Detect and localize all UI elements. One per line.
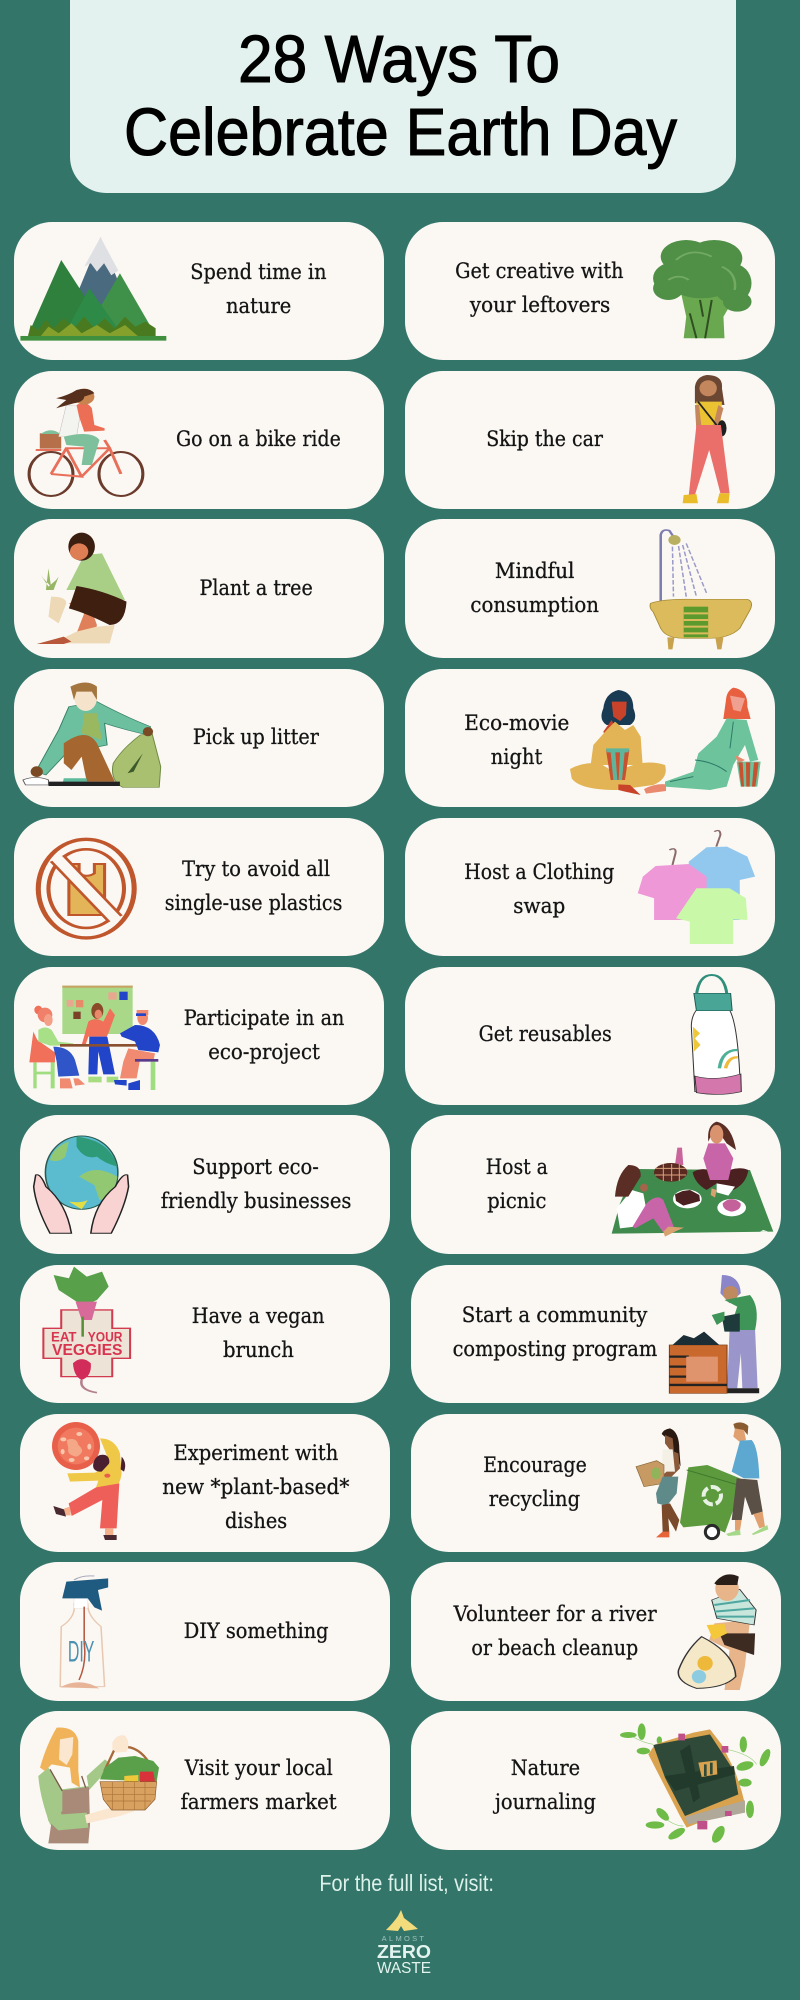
- logo: almost zero waste: ALMOST: [382, 1934, 426, 1943]
- panel: Try to avoid all single-use plastics: [14, 818, 384, 956]
- text: or beach cleanup: [471, 1636, 638, 1661]
- panel: Encourage recycling: [411, 1414, 781, 1552]
- text: composting program: [453, 1337, 657, 1362]
- icon: spray bottle: [60, 1576, 108, 1688]
- text: Start a community: [462, 1303, 648, 1328]
- label: DIY: DIY: [68, 1636, 95, 1669]
- text: [165, 857, 342, 916]
- panel: Host a picnic: [411, 1115, 781, 1254]
- panel: Have a vegan brunch: [20, 1265, 390, 1403]
- panel: Host a Clothing swap: [405, 818, 775, 956]
- text: [161, 1155, 352, 1214]
- icon: no plastic bag: [38, 839, 134, 938]
- text: journaling: [492, 1790, 596, 1815]
- text: [190, 260, 327, 319]
- panel: Eco-movie night: [405, 669, 775, 807]
- icon: shower bathtub: [650, 530, 752, 649]
- icon: reusable bottle: [691, 975, 741, 1094]
- title panel: [70, 0, 736, 193]
- text: Nature: [511, 1756, 580, 1781]
- text: brunch: [223, 1338, 294, 1363]
- text: Skip the car: [486, 427, 604, 452]
- text: Visit your local: [184, 1756, 333, 1781]
- text: Plant a tree: [200, 576, 313, 601]
- icon: bike rider: [29, 389, 143, 496]
- text: night: [491, 745, 543, 770]
- icon: team meeting: [29, 986, 160, 1090]
- text: [162, 1441, 350, 1534]
- text: Host a: [486, 1155, 548, 1180]
- panel: Spend time in nature: [14, 222, 384, 360]
- text: Pick up litter: [193, 725, 320, 750]
- text: friendly businesses: [161, 1189, 352, 1214]
- text: Get reusables: [479, 1022, 612, 1047]
- text: Mindful: [495, 559, 575, 584]
- text: dishes: [225, 1509, 287, 1534]
- text: [486, 1155, 548, 1214]
- panel: Nature journaling: [411, 1711, 781, 1850]
- text: [453, 1602, 657, 1661]
- panel: Get reusables: [405, 967, 775, 1105]
- panel: Participate in an eco-project: [14, 967, 384, 1105]
- panel: Support eco-friendly businesses: [20, 1115, 390, 1254]
- icon: picnic: [612, 1122, 773, 1237]
- text: [492, 1756, 596, 1815]
- text: Encourage: [483, 1453, 587, 1478]
- text: Have a vegan: [192, 1304, 325, 1329]
- text: Experiment with: [174, 1441, 338, 1466]
- label: eat your veggies: VEGGIES: [52, 1341, 123, 1359]
- icon: walking woman: [683, 375, 730, 503]
- icon: journal with leaves: [620, 1723, 773, 1845]
- footer text: For the full list, visit:: [319, 1870, 494, 1896]
- text: Spend time in: [190, 260, 327, 285]
- panel: Visit your local farmers market: [20, 1711, 390, 1850]
- text: nature: [226, 294, 291, 319]
- panel: Volunteer for a river or beach cleanup: [411, 1562, 781, 1701]
- icon: person planting: [37, 533, 127, 644]
- text: [455, 259, 624, 318]
- panel: Get creative with your leftovers: [405, 222, 775, 360]
- text: consumption: [470, 593, 599, 618]
- text: swap: [513, 894, 565, 919]
- text: eco-project: [208, 1040, 320, 1065]
- panel: DIY something: [20, 1562, 390, 1701]
- text: Get creative with: [455, 259, 624, 284]
- text: single-use plastics: [165, 891, 342, 916]
- text: your leftovers: [469, 293, 610, 318]
- icon: mountains: [20, 237, 166, 341]
- text: Try to avoid all: [182, 857, 330, 882]
- text: [470, 559, 599, 618]
- icon: broccoli: [653, 240, 752, 338]
- text: DIY something: [184, 1619, 329, 1644]
- label: eat your veggies: EAT: [51, 1330, 77, 1345]
- icon: t-shirts on hangers: [638, 831, 755, 944]
- panel: Go on a bike ride: [14, 371, 384, 509]
- icon: eat your veggies beet: [43, 1267, 130, 1393]
- text: [483, 1453, 587, 1512]
- icon: globe in hands: [34, 1136, 129, 1233]
- text: recycling: [489, 1487, 580, 1512]
- icon: two people with recycling bin: [636, 1422, 768, 1539]
- icon: woman with basket: [38, 1727, 159, 1843]
- title: [124, 22, 677, 170]
- text: Host a Clothing: [464, 860, 614, 885]
- panel: Mindful consumption: [405, 519, 775, 658]
- title: 28 Ways To: [238, 22, 560, 97]
- logo: almost zero waste: [377, 1910, 431, 1977]
- panel: Start a community composting program: [411, 1265, 781, 1403]
- text: Volunteer for a river: [453, 1602, 657, 1627]
- logo: almost zero waste: WASTE: [377, 1960, 431, 1977]
- panel: Plant a tree: [14, 519, 384, 658]
- panel: Experiment with new plant-based dishes: [20, 1414, 390, 1552]
- icon: person composting: [669, 1275, 759, 1393]
- text: [464, 860, 614, 919]
- logo: almost zero waste: ZERO: [377, 1942, 431, 1962]
- panel: Skip the car: [405, 371, 775, 509]
- icon: person picking up litter: [23, 682, 161, 787]
- text: [192, 1304, 325, 1363]
- label: eat your veggies: YOUR: [88, 1330, 123, 1345]
- text: Go on a bike ride: [176, 427, 341, 452]
- text: new *plant-based*: [162, 1475, 350, 1500]
- icon: banana peel: [386, 1910, 418, 1931]
- title: Celebrate Earth Day: [124, 95, 677, 170]
- icon: person with trash bag: [678, 1574, 756, 1690]
- text: Eco-movie: [464, 711, 569, 736]
- text: [464, 711, 569, 770]
- text: Support eco-: [192, 1155, 319, 1180]
- text: farmers market: [181, 1790, 337, 1815]
- text: [453, 1303, 657, 1362]
- text: [184, 1006, 345, 1065]
- text: [181, 1756, 337, 1815]
- text: picnic: [487, 1189, 546, 1214]
- text: Participate in an: [184, 1006, 345, 1031]
- label: eat your veggies: [51, 1330, 123, 1359]
- icon: person carrying tomato: [52, 1422, 125, 1540]
- icon: two women with popcorn: [570, 688, 761, 795]
- panel: Pick up litter: [14, 669, 384, 807]
